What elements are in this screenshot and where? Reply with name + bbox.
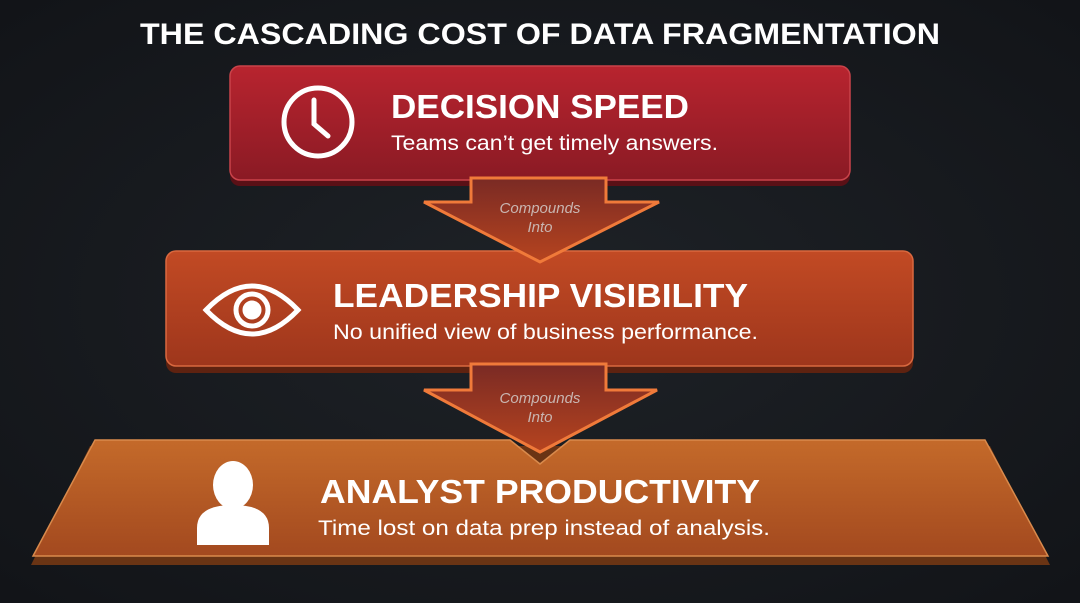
panel: leadership visibility bbox=[166, 251, 913, 373]
arrow: compounds into 1 bbox=[424, 178, 659, 262]
arrow: compounds into 2 bbox=[424, 364, 657, 452]
text: decision speed: Teams can’t get timely answers. bbox=[391, 132, 718, 155]
panel: decision speed bbox=[230, 66, 850, 186]
icon: eye bbox=[206, 286, 298, 334]
text: analyst productivity: Time lost on data prep instead of analysis. bbox=[318, 517, 770, 540]
panel: analyst productivity bbox=[31, 440, 1050, 565]
heading: leadership visibility: LEADERSHIP VISIBILITY bbox=[333, 277, 748, 314]
title: THE CASCADING COST OF DATA FRAGMENTATION bbox=[140, 18, 940, 51]
text: leadership visibility: No unified view of business performance. bbox=[333, 321, 758, 344]
arrow: compounds into 1: Into bbox=[527, 219, 553, 236]
arrow: compounds into 2: Into bbox=[527, 409, 553, 426]
icon: person bbox=[197, 461, 269, 545]
arrow: compounds into 1: Compounds bbox=[500, 200, 581, 217]
icon: clock bbox=[284, 88, 352, 156]
arrow: compounds into 2: Compounds bbox=[500, 390, 581, 407]
heading: decision speed: DECISION SPEED bbox=[391, 88, 689, 125]
heading: analyst productivity: ANALYST PRODUCTIVITY bbox=[320, 473, 760, 510]
